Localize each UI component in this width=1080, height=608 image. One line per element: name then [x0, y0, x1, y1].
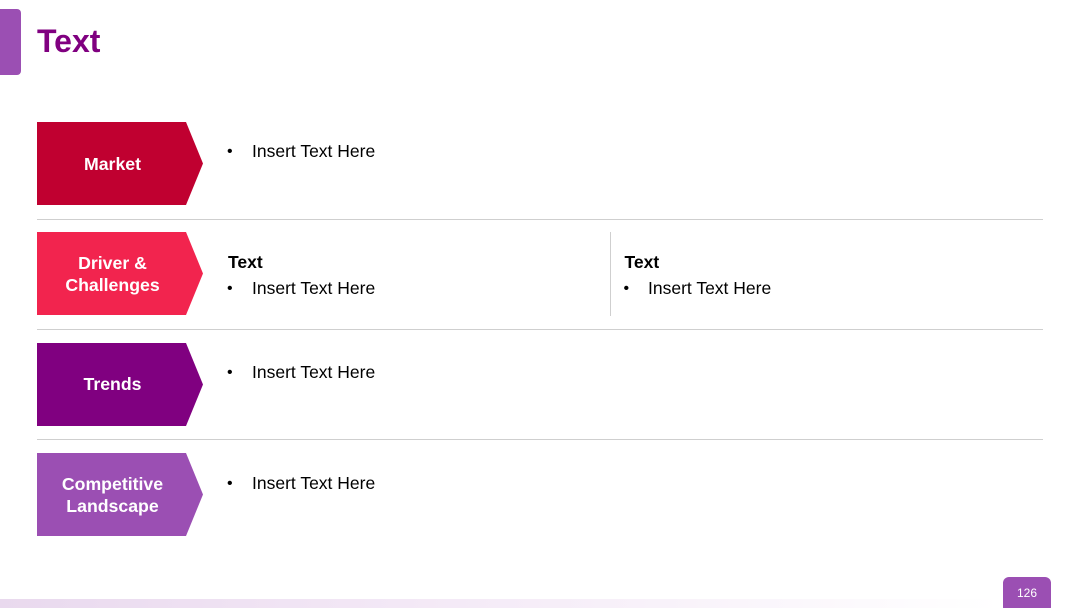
right column bullet: Insert Text Here [648, 278, 771, 298]
label: Driver and Challenges [65, 253, 160, 295]
right column heading: Text [624, 252, 659, 272]
label: Competitive Landscape [62, 474, 163, 516]
title accent tab [0, 9, 21, 75]
text block: right column [624, 252, 771, 298]
bullet: Trends: • [227, 364, 233, 381]
bullet: Market: • [227, 143, 233, 160]
label: Competitive Landscape: Landscape [66, 496, 159, 516]
bullet: Competitive Landscape: • [227, 475, 233, 492]
right column bullet: • [624, 280, 629, 297]
text block: left column [227, 252, 375, 298]
left column bullet: Insert Text Here [252, 278, 375, 298]
page number: 126 [1017, 586, 1037, 600]
column divider [610, 232, 611, 316]
left column bullet: • [227, 280, 233, 297]
label: Driver and Challenges: Challenges [65, 275, 160, 295]
label: Market: Market [84, 154, 141, 174]
footer gradient band [0, 599, 1000, 608]
label: Competitive Landscape: Competitive [62, 474, 163, 494]
page number badge [1003, 577, 1051, 608]
label: Driver and Challenges: Driver & [78, 253, 147, 273]
title: Text [37, 23, 100, 59]
bullet: Competitive Landscape: Insert Text Here [252, 473, 375, 493]
bullet: Market: Insert Text Here [252, 141, 375, 161]
bullet: Trends: Insert Text Here [252, 362, 375, 382]
left column heading: Text [228, 252, 263, 272]
label: Trends: Trends [84, 374, 142, 394]
